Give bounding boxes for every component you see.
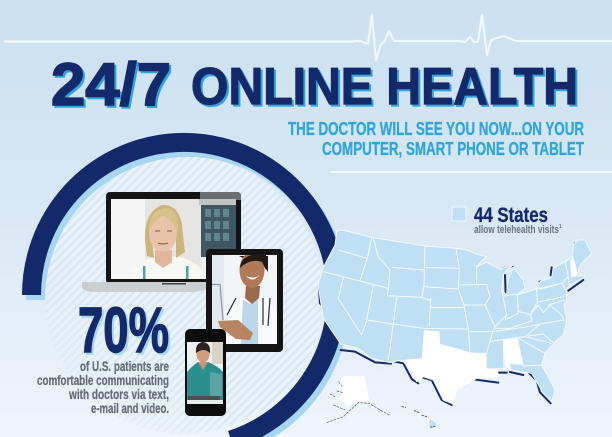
title: ONLINE HEALTH <box>193 60 580 118</box>
title: 24/7 <box>51 51 171 118</box>
states without telehealth <box>402 258 578 404</box>
70 percent caption: comfortable communicating <box>37 372 169 388</box>
70 percent caption: of U.S. patients are <box>80 358 169 374</box>
title: ONLINE HEALTH <box>191 58 578 116</box>
legend: 44 states: 44 States <box>474 204 548 227</box>
70 percent caption <box>37 358 169 416</box>
divider line <box>331 171 612 173</box>
video call: female doctor <box>143 199 236 279</box>
smartphone <box>185 329 226 416</box>
70 percent figure: 70% <box>78 294 169 366</box>
Hawaii <box>402 407 436 428</box>
video call: doctor with stethoscope <box>212 255 271 344</box>
contiguous states <box>318 230 592 404</box>
70 percent ring <box>31 142 340 437</box>
striped circle <box>45 156 323 434</box>
heartbeat line <box>4 15 612 60</box>
70 percent figure: 70% <box>80 296 171 368</box>
70 percent caption: e-mail and video. <box>91 400 169 416</box>
title: 24/7 <box>53 53 173 120</box>
subtitle <box>288 119 584 159</box>
state borders <box>323 237 585 368</box>
coastline shadow <box>319 232 583 405</box>
map of US states <box>318 230 592 428</box>
Alaska <box>327 376 389 423</box>
tablet <box>206 249 283 352</box>
legend: 44 states <box>452 204 562 236</box>
laptop <box>82 192 241 292</box>
video call: doctor in scrubs <box>187 342 223 404</box>
legend: 44 states: allow telehealth visits <box>474 224 559 236</box>
70 percent caption: with doctors via text, <box>68 386 169 402</box>
title <box>51 51 580 120</box>
legend: 44 states: 1 <box>559 224 562 230</box>
